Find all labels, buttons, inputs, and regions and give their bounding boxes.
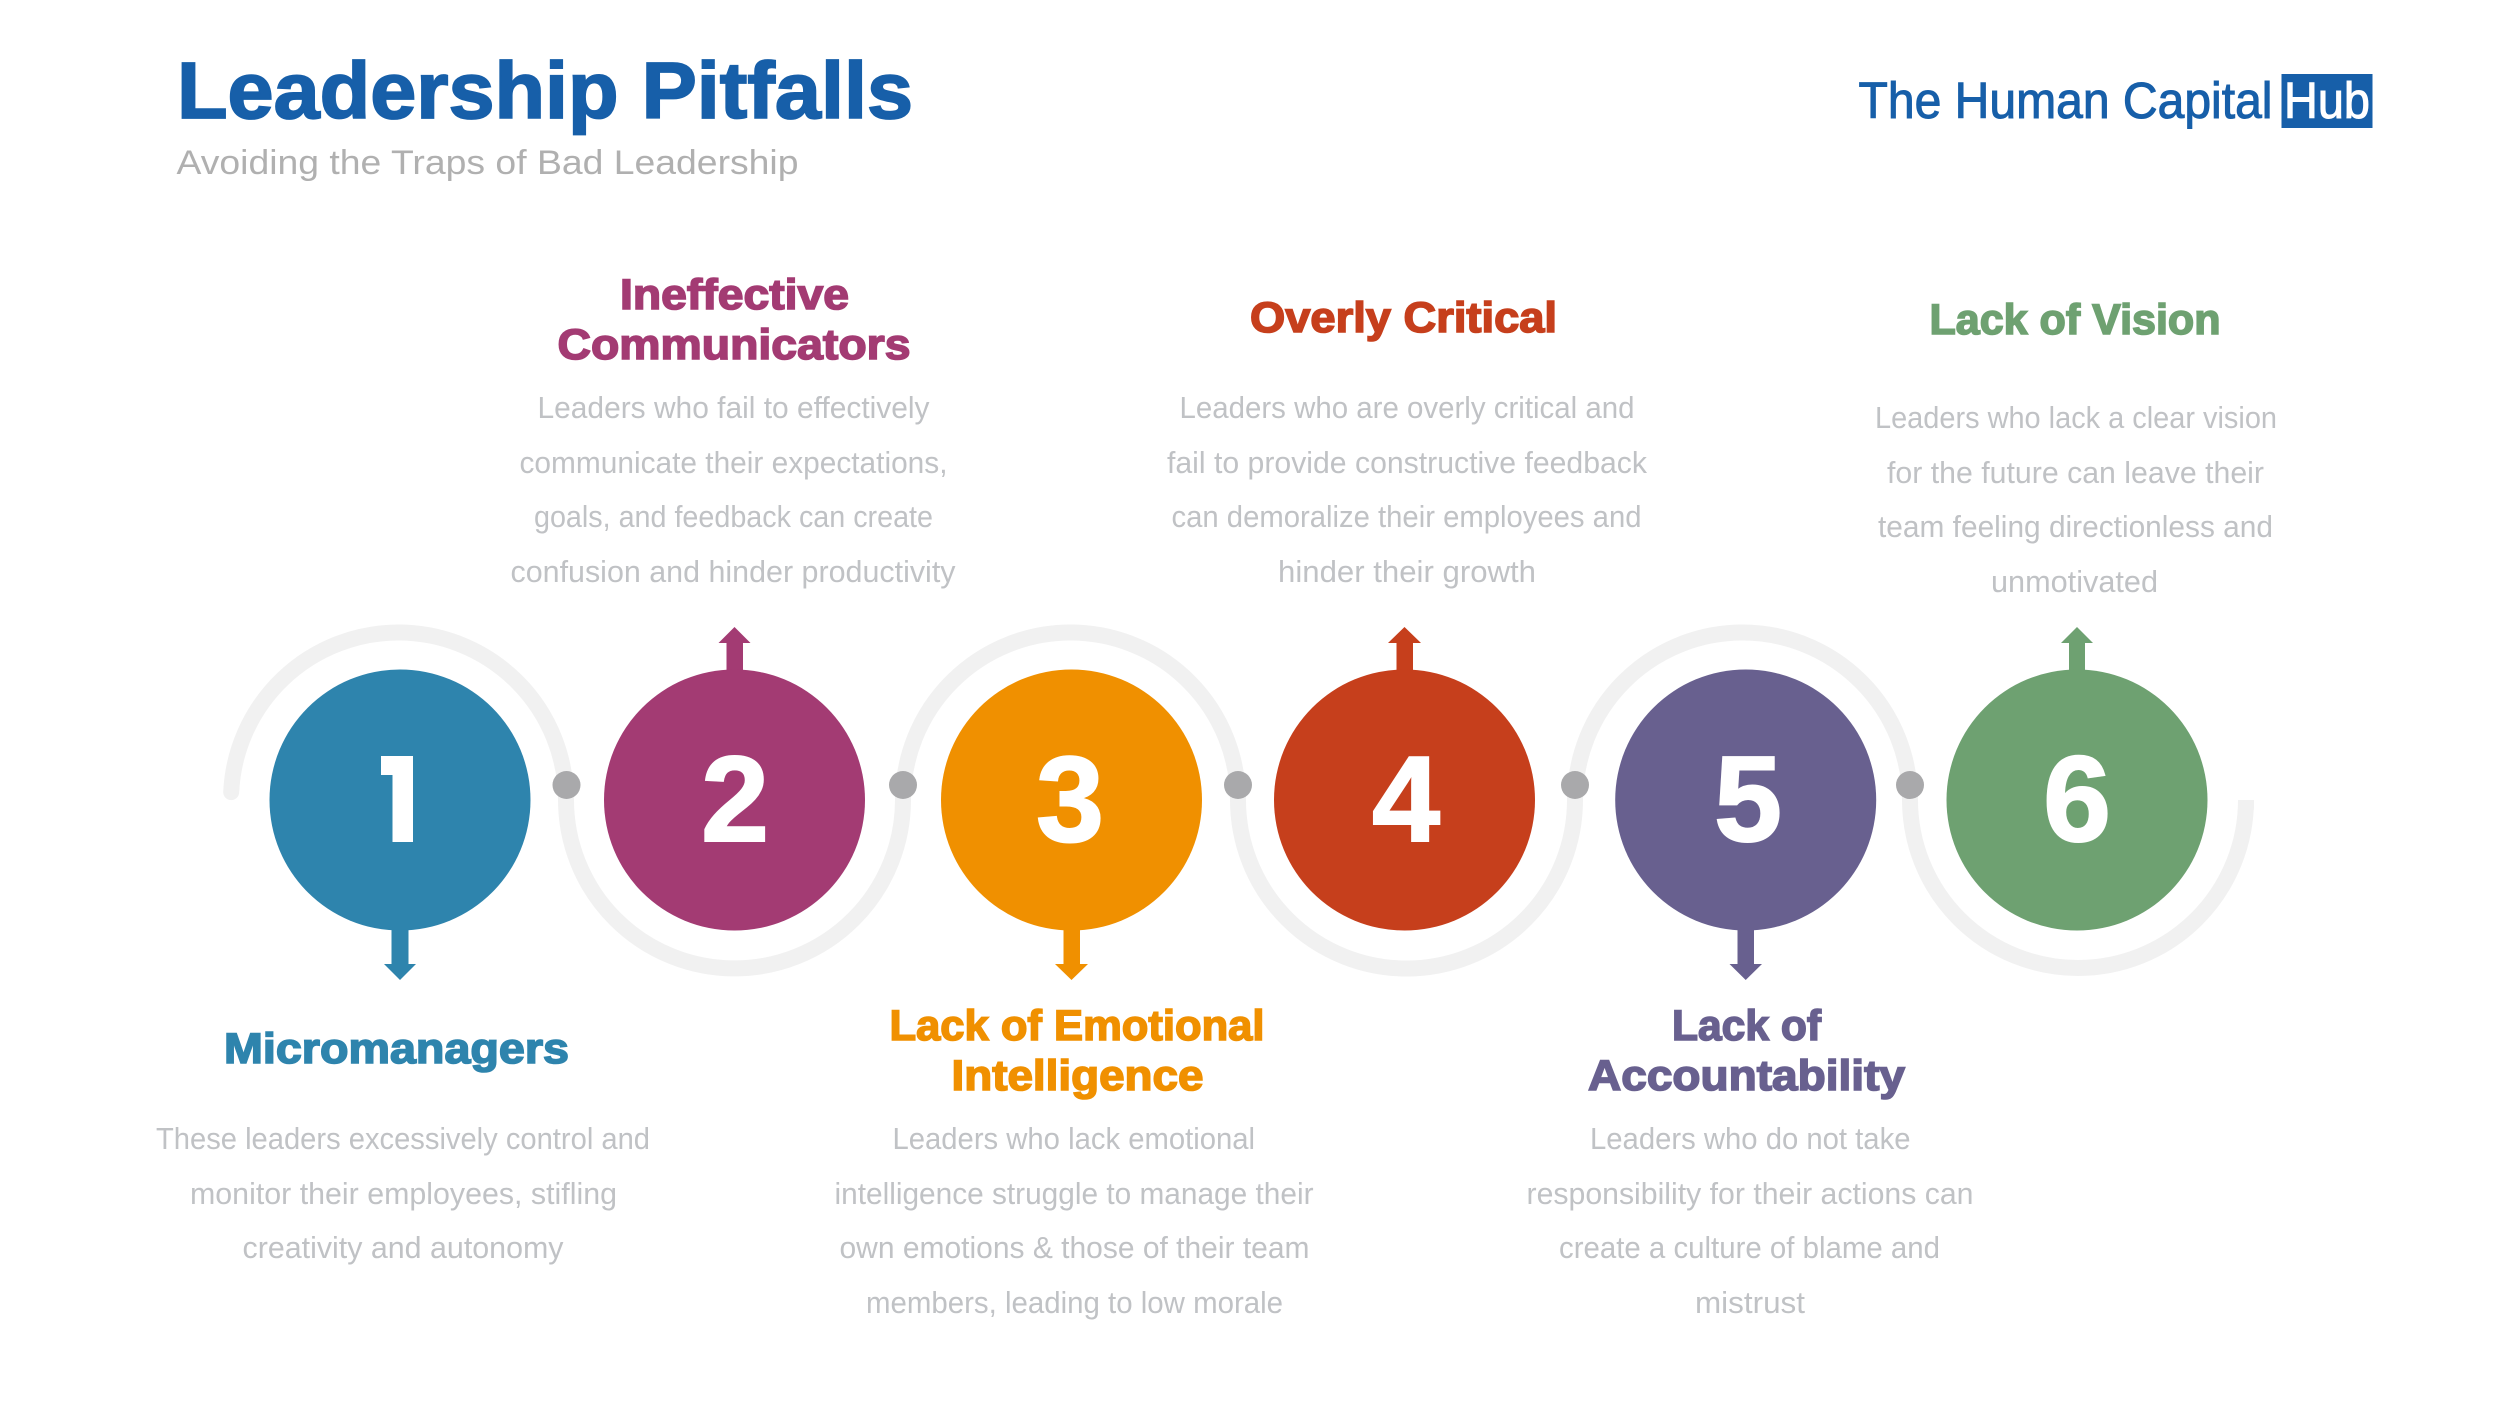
step 2: circle with up arrow: 2 <box>701 731 769 867</box>
logo: The Human Capital Hub: Hub <box>2284 72 2370 129</box>
step 5: circle with down arrow: 5 <box>1714 731 1782 867</box>
step 1: circle with down arrow: 1 <box>363 731 431 867</box>
description: Micromanagers <box>156 1121 650 1265</box>
heading: Lack of Accountability: Lack of <box>1672 1002 1822 1050</box>
step 4: circle with up arrow <box>1274 627 1535 930</box>
panel: Ineffective Communicators <box>510 271 956 589</box>
description: Ineffective Communicators <box>510 390 956 589</box>
description: Lack of Emotional Intelligence: own emotions & those of their team <box>840 1230 1310 1265</box>
description: Lack of Accountability: mistrust <box>1695 1285 1805 1320</box>
heading: Ineffective Communicators: Communicators <box>558 321 910 369</box>
heading: Lack of Accountability <box>1588 1002 1905 1100</box>
step 6: circle with up arrow <box>1946 627 2208 930</box>
description: Lack of Emotional Intelligence <box>834 1121 1314 1320</box>
description: Overly Critical: can demoralize their employees and <box>1172 499 1642 534</box>
description: Lack of Emotional Intelligence: Leaders who lack emotional <box>892 1121 1255 1156</box>
logo: The Human Capital Hub: The Human Capital <box>1858 72 2272 129</box>
description: Lack of Vision: unmotivated <box>1991 564 2158 599</box>
description: Lack of Vision: Leaders who lack a clear vision <box>1875 400 2277 435</box>
description: Lack of Accountability <box>1526 1121 1974 1320</box>
panel: Lack of Emotional Intelligence <box>834 1002 1314 1320</box>
panel: Micromanagers <box>156 1025 650 1265</box>
heading: Ineffective Communicators: Ineffective <box>620 271 849 319</box>
description: Ineffective Communicators: confusion and hinder productivity <box>510 554 956 589</box>
panel: Lack of Accountability <box>1526 1002 1974 1320</box>
title: Leadership Pitfalls <box>177 46 913 135</box>
description: Micromanagers: monitor their employees, stifling <box>190 1176 617 1211</box>
step 4: circle with up arrow: 4 <box>1372 731 1440 867</box>
description: Lack of Accountability: create a culture of blame and <box>1559 1230 1940 1265</box>
description: Overly Critical: Leaders who are overly critical and <box>1180 390 1634 425</box>
description: Lack of Vision: team feeling directionless and <box>1878 509 2273 544</box>
step 2: circle with up arrow <box>604 627 865 930</box>
heading: Overly Critical: Overly Critical <box>1250 294 1557 342</box>
step 5: circle with down arrow <box>1615 670 1876 980</box>
heading: Lack of Emotional Intelligence: Intelligence <box>952 1052 1204 1100</box>
description: Overly Critical: hinder their growth <box>1278 554 1536 589</box>
step 6: circle with up arrow: 6 <box>2043 731 2111 867</box>
description: Ineffective Communicators: communicate their expectations, <box>520 445 948 480</box>
step 3: circle with down arrow <box>941 670 1202 980</box>
description: Lack of Vision <box>1875 400 2277 599</box>
description: Micromanagers: creativity and autonomy <box>242 1230 564 1265</box>
panel: Lack of Vision <box>1875 296 2277 599</box>
heading: Lack of Emotional Intelligence <box>890 1002 1264 1100</box>
subtitle: Avoiding the Traps of Bad Leadership <box>176 144 798 182</box>
heading: Lack of Vision: Lack of Vision <box>1930 296 2220 344</box>
description: Lack of Accountability: responsibility for their actions can <box>1526 1176 1974 1211</box>
description: Ineffective Communicators: Leaders who fail to effectively <box>538 390 930 425</box>
description: Lack of Emotional Intelligence: members, leading to low morale <box>866 1285 1283 1320</box>
description: Lack of Emotional Intelligence: intelligence struggle to manage their <box>834 1176 1314 1211</box>
heading: Micromanagers: Micromanagers <box>224 1025 569 1073</box>
description: Lack of Vision: for the future can leave their <box>1887 455 2264 490</box>
description: Ineffective Communicators: goals, and feedback can create <box>534 499 933 534</box>
description: Overly Critical: fail to provide constructive feedback <box>1167 445 1647 480</box>
step 3: circle with down arrow: 3 <box>1036 731 1104 867</box>
connector dots <box>552 771 1924 799</box>
panel: Overly Critical <box>1167 294 1647 589</box>
step 1: circle with down arrow <box>270 670 530 980</box>
heading: Ineffective Communicators <box>558 271 910 369</box>
description: Overly Critical <box>1167 390 1647 589</box>
description: Micromanagers: These leaders excessively control and <box>156 1121 650 1156</box>
wavy ribbon connecting the steps <box>231 632 2246 968</box>
heading: Lack of Accountability: Accountability <box>1588 1052 1905 1100</box>
heading: Lack of Emotional Intelligence: Lack of Emotional <box>890 1002 1264 1050</box>
description: Lack of Accountability: Leaders who do not take <box>1590 1121 1910 1156</box>
